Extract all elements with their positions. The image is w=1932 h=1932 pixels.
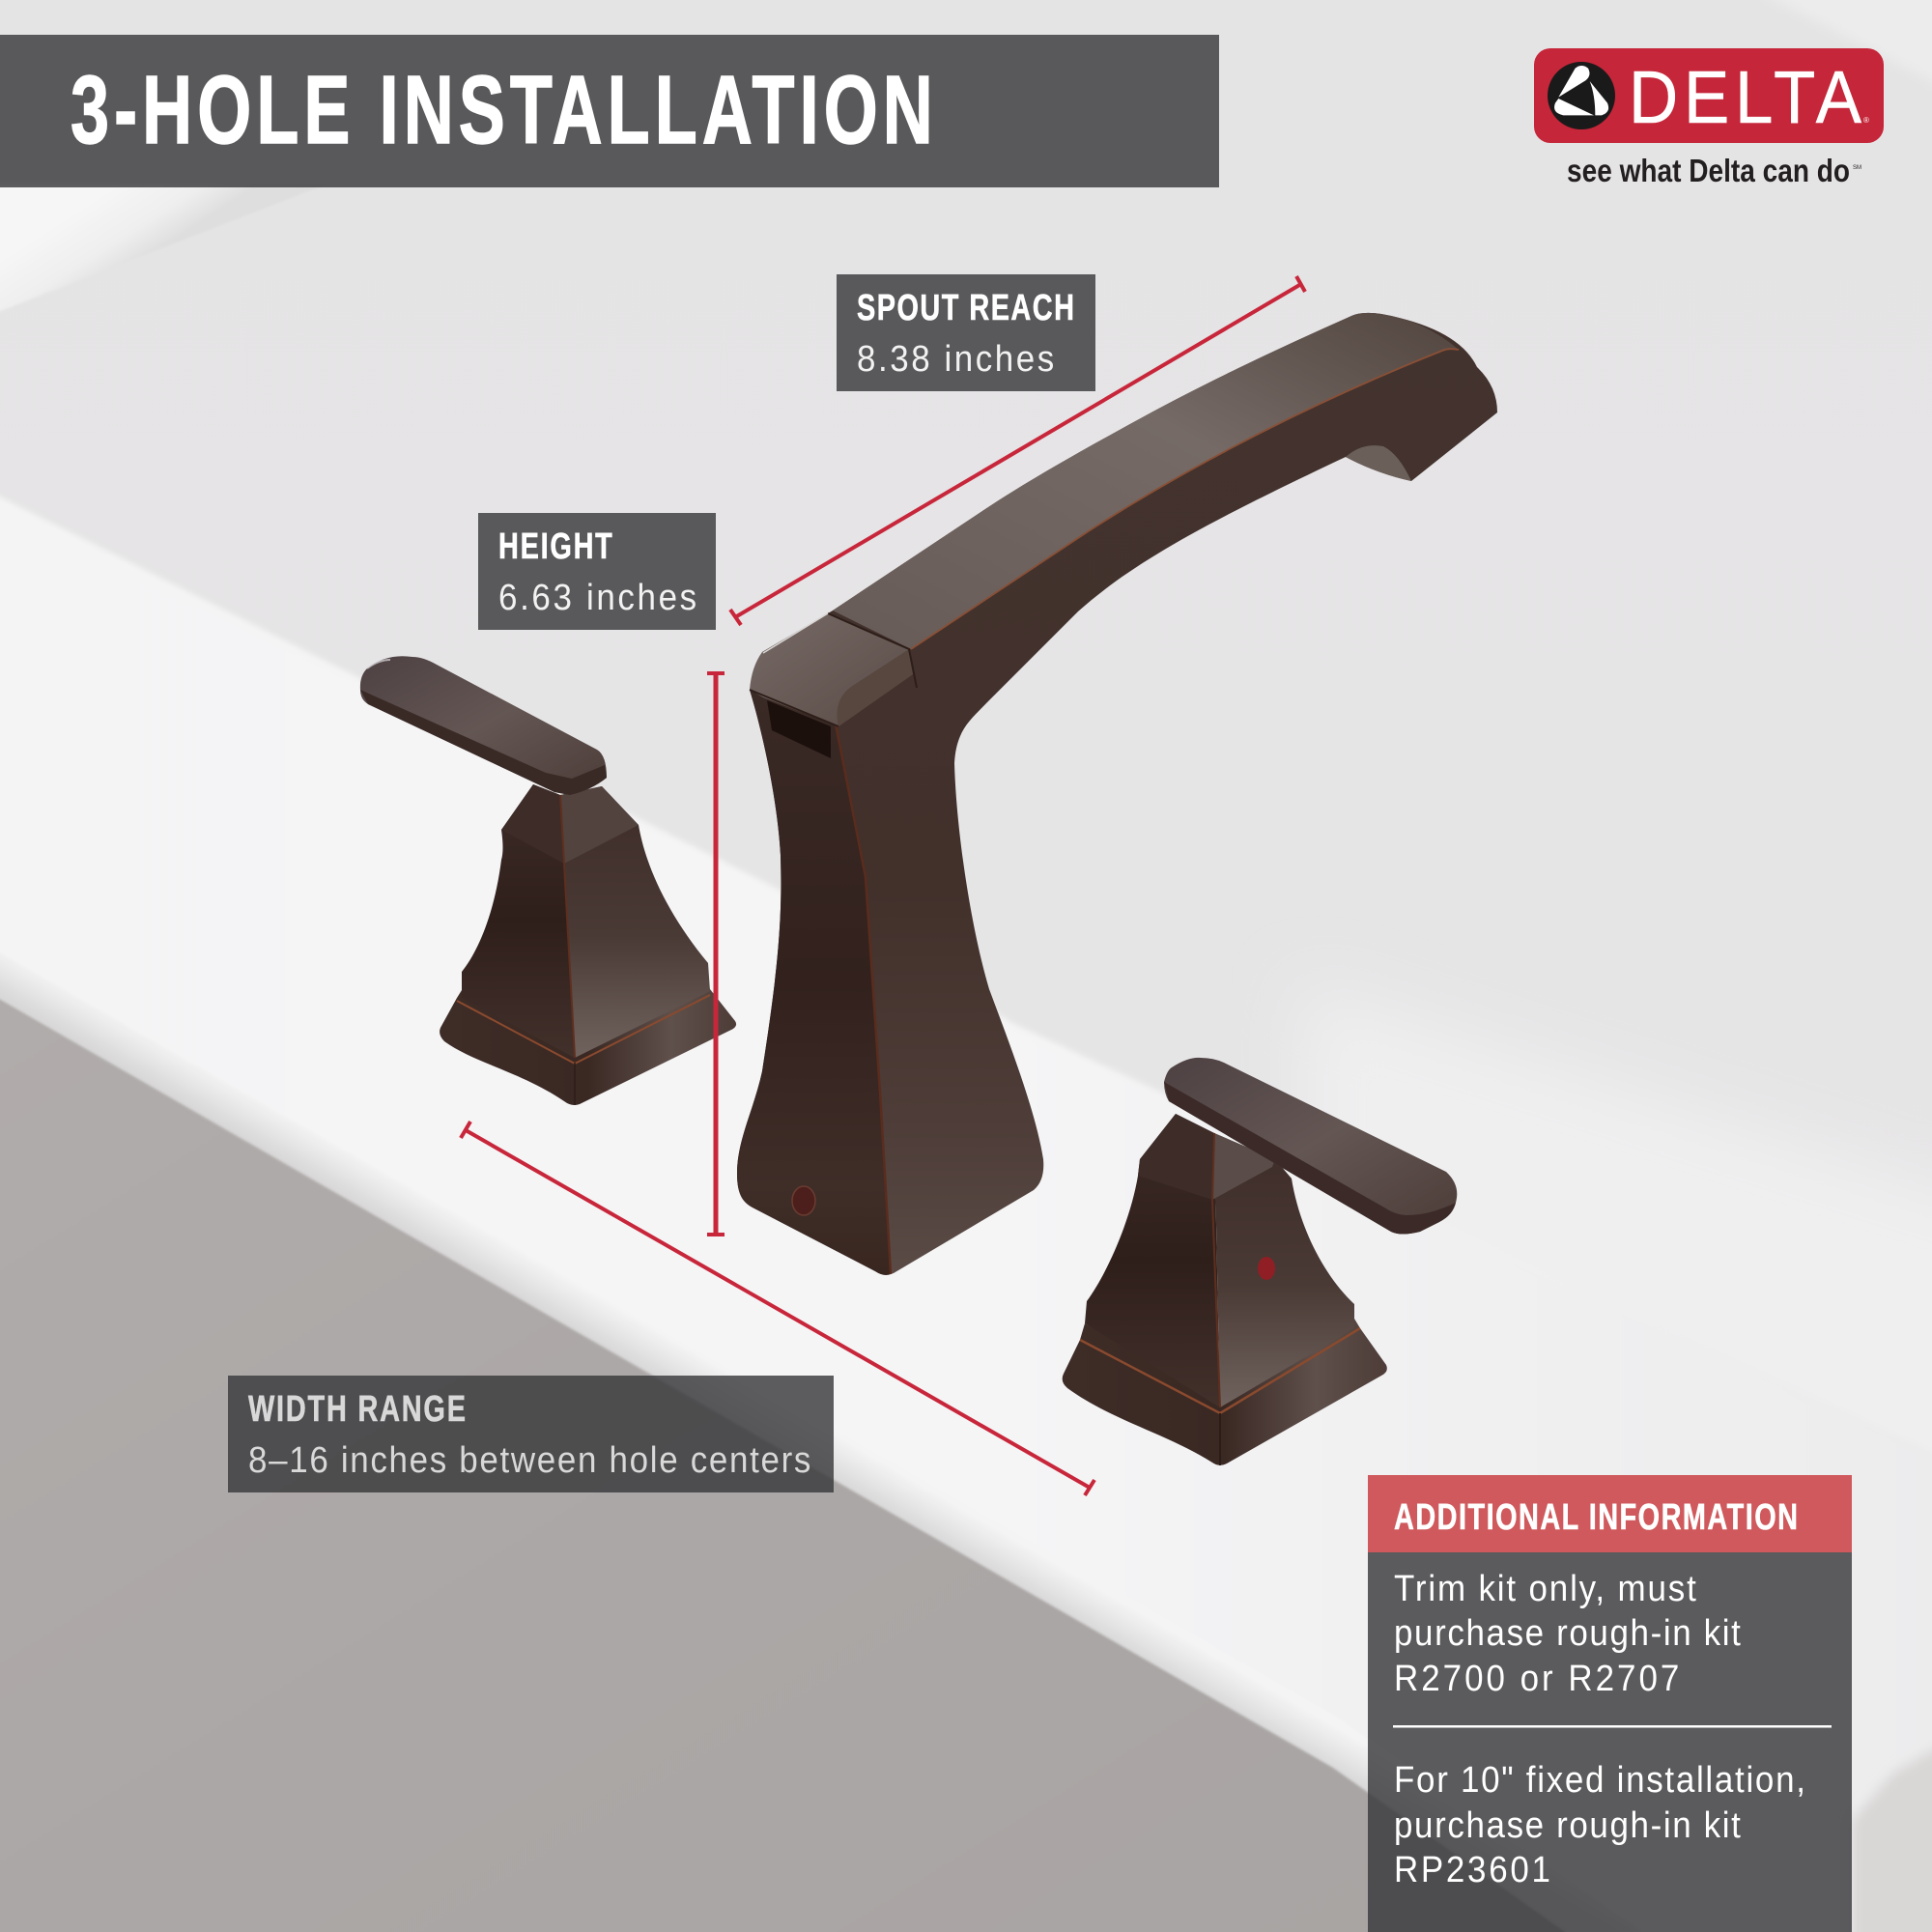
panel: additional information xyxy=(1368,1475,1852,1932)
panel: additional information: ADDITIONAL INFORMATION xyxy=(1394,1496,1798,1538)
logo: Delta: DELTA xyxy=(1629,55,1862,139)
title banner xyxy=(0,35,1219,187)
icon: center spout faucet xyxy=(737,313,1497,1275)
dimension line: width range xyxy=(461,1122,1094,1495)
icon: left handle xyxy=(360,656,736,1105)
panel: additional information: For 10" fixed installation, xyxy=(1394,1759,1805,1800)
panel: additional information: purchase rough-in kit xyxy=(1394,1804,1741,1845)
label: height xyxy=(478,513,716,630)
panel: additional information: R2700 or R2707 xyxy=(1394,1658,1679,1698)
logo: Delta xyxy=(1534,48,1884,188)
panel: additional information: purchase rough-in kit xyxy=(1394,1612,1741,1653)
panel: additional information: Trim kit only, must xyxy=(1394,1568,1696,1608)
label: spout reach: 8.38 inches xyxy=(857,338,1054,379)
label: width range: WIDTH RANGE xyxy=(248,1388,466,1430)
dimension line: spout reach xyxy=(730,276,1305,625)
spout top face xyxy=(833,313,1459,649)
label: spout reach xyxy=(837,274,1095,391)
label: height: 6.63 inches xyxy=(498,577,696,617)
cap xyxy=(750,613,913,726)
label: height: HEIGHT xyxy=(498,526,612,567)
logo: Delta: ® xyxy=(1863,116,1869,125)
red hot indicator xyxy=(1258,1257,1275,1280)
label: width range: 8–16 inches between hole centers xyxy=(248,1439,810,1480)
dimension line: height xyxy=(707,673,724,1235)
slot xyxy=(767,700,831,758)
logo: Delta: see what Delta can do xyxy=(1567,153,1850,188)
icon: right handle xyxy=(1063,1058,1457,1465)
label: spout reach: SPOUT REACH xyxy=(857,287,1074,328)
button xyxy=(792,1186,815,1215)
label: width range xyxy=(228,1376,834,1492)
panel: additional information: RP23601 xyxy=(1394,1849,1550,1889)
logo: Delta: SM xyxy=(1853,165,1861,171)
title: 3-HOLE INSTALLATION xyxy=(71,56,933,164)
